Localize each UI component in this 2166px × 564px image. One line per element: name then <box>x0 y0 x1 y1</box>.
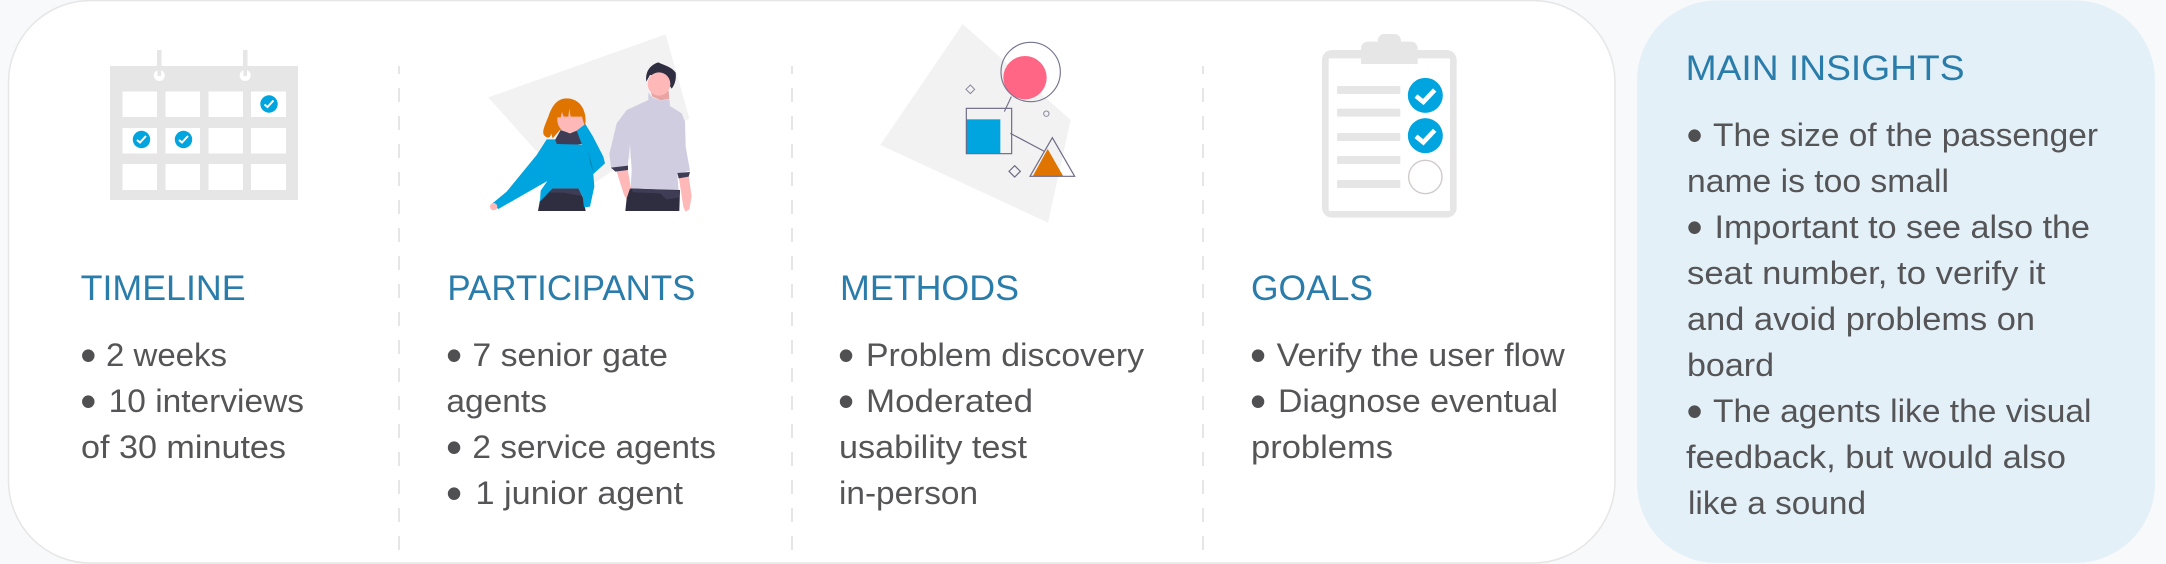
text block: insights list: • <box>1687 201 1703 253</box>
heading: main insights: MAIN INSIGHTS <box>1686 49 1965 88</box>
icon: calendar <box>110 50 298 200</box>
text block: methods list: • <box>838 375 854 427</box>
panel: timeline <box>80 50 304 465</box>
text block: goals list: Verify the user flow <box>1277 337 1566 373</box>
panel: main card <box>8 0 1615 563</box>
text block: goals list: • <box>1250 375 1266 427</box>
text block: insights list: The size of the passenger <box>1713 117 2098 153</box>
text block: insights list: • <box>1687 385 1703 437</box>
heading: participants: PARTICIPANTS <box>447 269 695 308</box>
text block: methods list: Moderated <box>866 383 1033 419</box>
text block: insights list: seat number, to verify it <box>1687 255 2046 291</box>
text block: goals list: problems <box>1251 429 1393 465</box>
panel: participants <box>446 34 716 519</box>
text block: insights list: and avoid problems on <box>1687 301 2035 337</box>
text block: timeline list: 2 weeks <box>106 337 227 373</box>
text block: insights list: The agents like the visual <box>1713 393 2092 429</box>
text block: insights list: Important to see also the <box>1714 209 2090 245</box>
text block: participants list: • <box>446 421 462 473</box>
text block: insights list: board <box>1687 347 1774 383</box>
text block: participants list: • <box>446 467 462 519</box>
text block: methods list: Problem discovery <box>866 337 1144 373</box>
text block: goals list: • <box>1250 329 1266 381</box>
text block: participants list: 7 senior gate <box>472 337 668 373</box>
heading: methods: METHODS <box>840 269 1019 308</box>
insights background <box>1637 0 2155 563</box>
icon: two people illustration <box>488 34 692 212</box>
text block: insights list: • <box>1687 109 1703 161</box>
heading: goals: GOALS <box>1251 269 1373 308</box>
text block: methods list <box>838 329 1144 511</box>
text block: methods list: in-person <box>839 475 978 511</box>
text block: timeline list <box>80 329 304 465</box>
text block: timeline list: • <box>80 329 96 381</box>
panel: main insights <box>1637 0 2155 563</box>
text block: insights list: name is too small <box>1687 163 1949 199</box>
text block: participants list: 2 service agents <box>472 429 716 465</box>
text block: participants list <box>446 329 716 519</box>
panel: goals <box>1250 34 1566 465</box>
icon: clipboard checklist <box>1322 34 1457 218</box>
text block: insights list: like a sound <box>1688 485 1866 521</box>
panel: methods <box>838 24 1144 511</box>
text block: methods list: • <box>838 329 854 381</box>
text block: timeline list: • <box>80 375 96 427</box>
text block: goals list <box>1250 329 1566 465</box>
text block: goals list: Diagnose eventual <box>1278 383 1558 419</box>
text block: insights list <box>1686 109 2098 521</box>
icon: geometric shapes illustration <box>880 24 1075 223</box>
text block: participants list: 1 junior agent <box>476 475 683 511</box>
text block: methods list: usability test <box>839 429 1027 465</box>
text block: participants list: • <box>446 329 462 381</box>
heading: timeline: TIMELINE <box>81 269 246 308</box>
text block: timeline list: of 30 minutes <box>81 429 286 465</box>
text block: participants list: agents <box>446 383 547 419</box>
text block: timeline list: 10 interviews <box>109 383 304 419</box>
text block: insights list: feedback, but would also <box>1686 439 2066 475</box>
